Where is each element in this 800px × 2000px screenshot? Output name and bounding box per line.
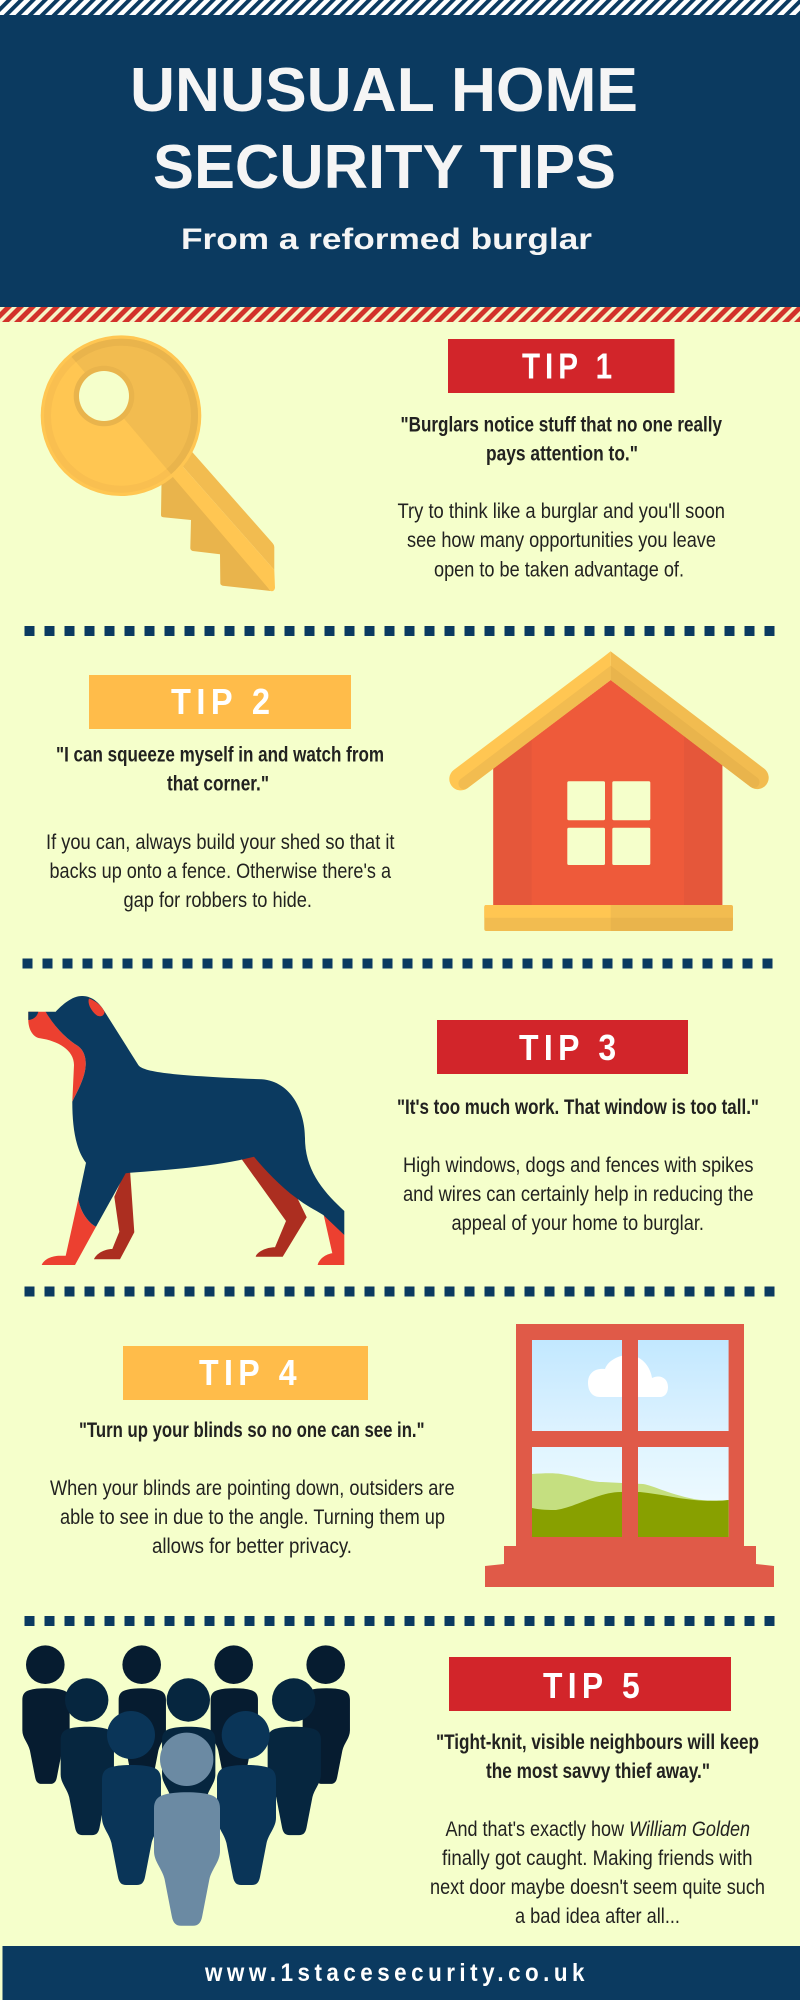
red striped band bbox=[0, 307, 800, 322]
tip 1 body bbox=[398, 499, 725, 582]
panel: tip 4 bbox=[50, 1324, 774, 1587]
subtitle: From a reformed burglar bbox=[181, 223, 592, 256]
tip 5 body: And that's exactly how William Golden bbox=[446, 1817, 750, 1841]
tip 4 body bbox=[50, 1476, 455, 1558]
tip 1 body: open to be taken advantage of. bbox=[434, 558, 684, 582]
tip 2 body bbox=[46, 830, 395, 912]
icon: house bbox=[461, 643, 757, 931]
panel: tip 2 bbox=[46, 643, 757, 931]
footer bar bbox=[2, 1946, 800, 2000]
icon: window bbox=[485, 1324, 774, 1587]
tip 4 body: able to see in due to the angle. Turning them up bbox=[60, 1505, 445, 1529]
tip 1 quote: "Burglars notice stuff that no one really bbox=[400, 412, 722, 436]
tip 2 body: If you can, always build your shed so that it bbox=[46, 830, 395, 854]
tip 2 quote: "I can squeeze myself in and watch from bbox=[56, 742, 384, 766]
tip 1 body: Try to think like a burglar and you'll soon bbox=[398, 499, 725, 523]
tip 2 body: backs up onto a fence. Otherwise there's a bbox=[50, 859, 391, 883]
tip 4 badge bbox=[123, 1346, 368, 1400]
highlighted person bbox=[154, 1733, 220, 1926]
tip 5 quote bbox=[436, 1730, 759, 1783]
tip 4 body: When your blinds are pointing down, outsiders are bbox=[50, 1476, 455, 1500]
tip 1 body: see how many opportunities you leave bbox=[407, 528, 716, 552]
back row bbox=[22, 1645, 350, 1784]
tip 1 quote bbox=[400, 412, 722, 466]
tip 5 badge bbox=[449, 1657, 731, 1711]
panel: tip 1 bbox=[41, 335, 725, 591]
header panel bbox=[0, 0, 800, 307]
tip 5 body: finally got caught. Making friends with bbox=[442, 1846, 752, 1870]
middle row bbox=[61, 1678, 321, 1835]
panel: tip 5 bbox=[22, 1645, 765, 1928]
tip 4 body: allows for better privacy. bbox=[152, 1534, 352, 1558]
tip 3 body bbox=[403, 1153, 754, 1235]
tip 3 badge bbox=[437, 1020, 688, 1074]
tip 3 body: appeal of your home to burglar. bbox=[452, 1211, 704, 1235]
panel: tip 3 bbox=[28, 996, 759, 1265]
title: SECURITY TIPS bbox=[153, 133, 616, 202]
tip 2 badge: TIP 2 bbox=[171, 681, 276, 722]
tip 3 badge: TIP 3 bbox=[519, 1027, 622, 1068]
icon: key bbox=[41, 335, 275, 591]
tip 2 quote: that corner." bbox=[167, 772, 269, 796]
tip 1 badge: TIP 1 bbox=[522, 346, 617, 386]
website url: www.1stacesecurity.co.uk bbox=[204, 1959, 589, 1987]
tip 4 badge: TIP 4 bbox=[199, 1352, 302, 1393]
tip 2 quote bbox=[56, 742, 384, 796]
title bbox=[130, 56, 638, 202]
icon: group of neighbours bbox=[22, 1645, 350, 1926]
tip 5 badge: TIP 5 bbox=[543, 1665, 645, 1706]
icon: dog bbox=[28, 996, 344, 1265]
tip 4 quote: "Turn up your blinds so no one can see in." bbox=[79, 1418, 424, 1442]
tip 5 body: a bad idea after all... bbox=[515, 1904, 680, 1928]
tip 2 body: gap for robbers to hide. bbox=[124, 888, 312, 912]
tip 5 quote: the most savvy thief away." bbox=[486, 1759, 710, 1783]
tip 1 badge bbox=[448, 339, 674, 393]
tip 1 quote: pays attention to." bbox=[486, 442, 638, 466]
tip 2 badge bbox=[89, 675, 351, 729]
front row bbox=[102, 1711, 276, 1885]
tip 5 body bbox=[430, 1817, 765, 1928]
title: UNUSUAL HOME bbox=[130, 56, 638, 125]
